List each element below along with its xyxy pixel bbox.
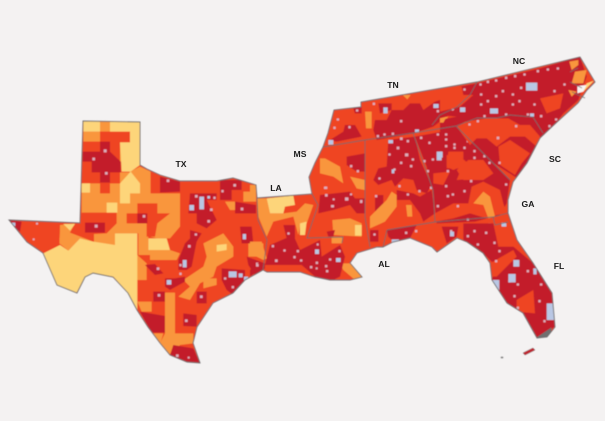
map figure	[8, 56, 596, 364]
Mid-south and Georgia counties	[320, 93, 510, 242]
Florida and Gulf coast counties	[392, 223, 555, 340]
label: TN: TN	[387, 80, 399, 90]
Louisiana and Mississippi counties	[249, 184, 365, 280]
state borders	[257, 68, 585, 270]
Florida Keys	[501, 348, 535, 358]
county shading	[9, 57, 594, 363]
label: MS: MS	[294, 149, 307, 159]
Texas counties	[9, 121, 265, 363]
label: FL: FL	[554, 261, 564, 271]
Carolinas counties	[440, 57, 594, 180]
land base	[9, 57, 595, 363]
choropleth map of southeastern states	[9, 57, 595, 363]
Texas county markers	[33, 149, 259, 359]
label: AL: AL	[378, 259, 390, 269]
label: LA: LA	[270, 183, 282, 193]
label: SC: SC	[549, 154, 561, 164]
state labels	[176, 56, 564, 271]
label: TX: TX	[176, 159, 187, 169]
label: GA: GA	[522, 199, 534, 209]
state and coast outline	[9, 57, 595, 363]
label: NC: NC	[513, 56, 525, 66]
